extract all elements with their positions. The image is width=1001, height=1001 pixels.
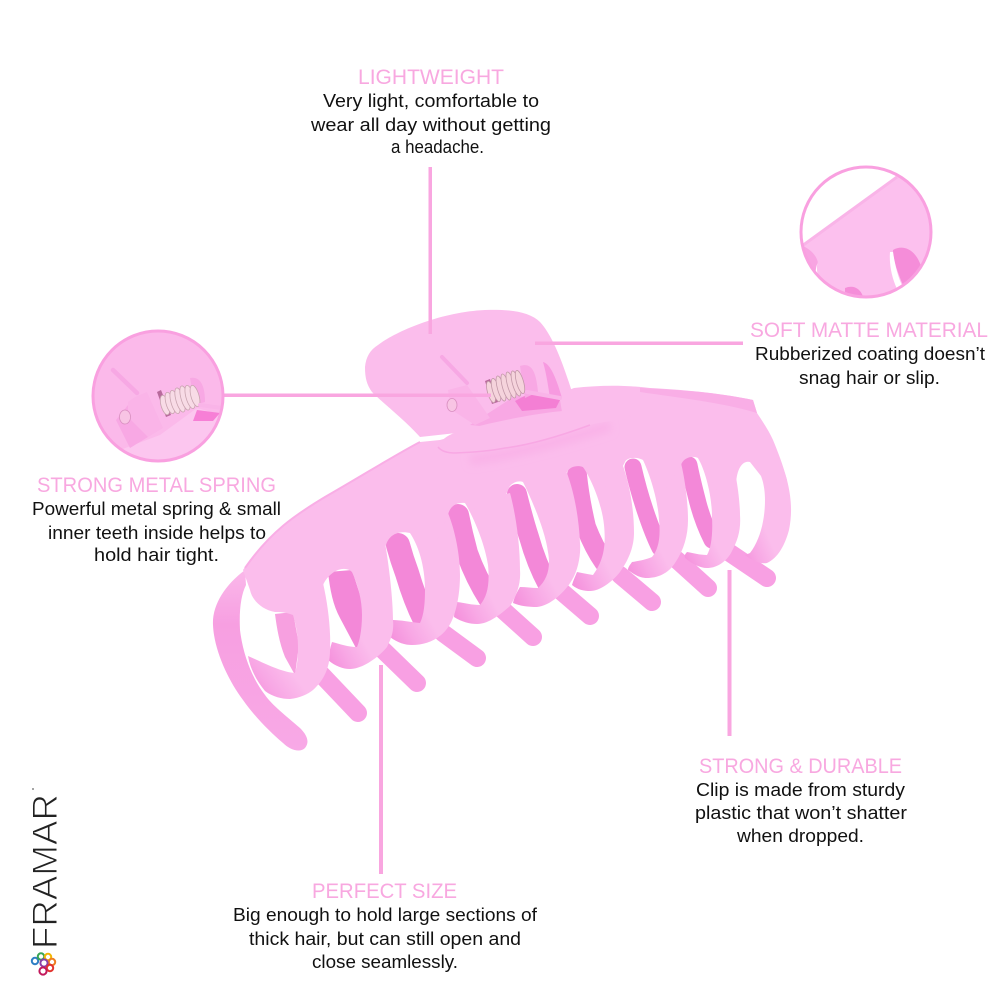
callout line: perfect size bbox=[379, 665, 383, 874]
text block: perfect size: PERFECT SIZE bbox=[312, 880, 457, 903]
text block: soft matte material: snag hair or slip. bbox=[799, 368, 940, 388]
front thumb tab bbox=[438, 410, 640, 453]
text block: strong and durable: STRONG & DURABLE bbox=[699, 755, 902, 778]
callout line: lightweight bbox=[428, 167, 432, 334]
text block: lightweight: a headache. bbox=[391, 137, 484, 157]
text block: strong metal spring bbox=[32, 474, 281, 565]
inner tooth behind first finger bbox=[275, 612, 299, 675]
circle inset: matte material close-up bbox=[800, 167, 940, 300]
callout line: strong and durable bbox=[728, 570, 732, 736]
text block: strong metal spring: hold hair tight. bbox=[94, 545, 219, 565]
text block: strong and durable: plastic that won’t shatter bbox=[695, 803, 907, 823]
text block: strong metal spring: Powerful metal spring & small bbox=[32, 499, 281, 519]
text block: soft matte material bbox=[750, 319, 988, 388]
text block: perfect size bbox=[233, 880, 538, 972]
text block: lightweight: LIGHTWEIGHT bbox=[358, 66, 504, 89]
inner teeth seen through gaps bbox=[398, 465, 712, 620]
spring mechanism bbox=[442, 357, 562, 428]
text block: perfect size: Big enough to hold large sections of bbox=[233, 905, 538, 925]
hair claw clip bbox=[213, 310, 791, 750]
callout line: spring bbox=[224, 394, 491, 397]
tab shadow bbox=[470, 426, 610, 460]
body top edge highlight bbox=[245, 442, 420, 568]
body right tab bbox=[640, 388, 757, 413]
brand logo: Framar: FRAMAR bbox=[26, 794, 65, 949]
text block: strong and durable: Clip is made from sturdy bbox=[696, 780, 905, 800]
text block: strong and durable bbox=[695, 755, 907, 846]
clip fingers with curled hooks bbox=[248, 437, 791, 699]
main clip body bbox=[243, 386, 787, 625]
text block: lightweight: wear all day without getting bbox=[310, 115, 551, 135]
text block: strong metal spring: inner teeth inside helps to bbox=[48, 523, 266, 543]
text block: soft matte material: Rubberized coating doesn’t bbox=[755, 344, 985, 364]
text block: lightweight bbox=[310, 66, 551, 157]
text block: perfect size: close seamlessly. bbox=[312, 952, 458, 972]
text block: soft matte material: SOFT MATTE MATERIAL bbox=[750, 319, 988, 342]
text block: perfect size: thick hair, but can still open and bbox=[249, 929, 521, 949]
circle inset: spring close-up bbox=[93, 331, 225, 470]
back teeth bbox=[320, 553, 767, 713]
callout line: soft matte bbox=[535, 342, 743, 345]
inner tooth behind second finger bbox=[328, 570, 364, 650]
text block: lightweight: Very light, comfortable to bbox=[323, 91, 539, 111]
text block: strong and durable: when dropped. bbox=[736, 826, 864, 846]
left outer hook bbox=[213, 570, 307, 750]
text block: strong metal spring: STRONG METAL SPRING bbox=[37, 474, 276, 497]
back plate bbox=[365, 310, 575, 437]
